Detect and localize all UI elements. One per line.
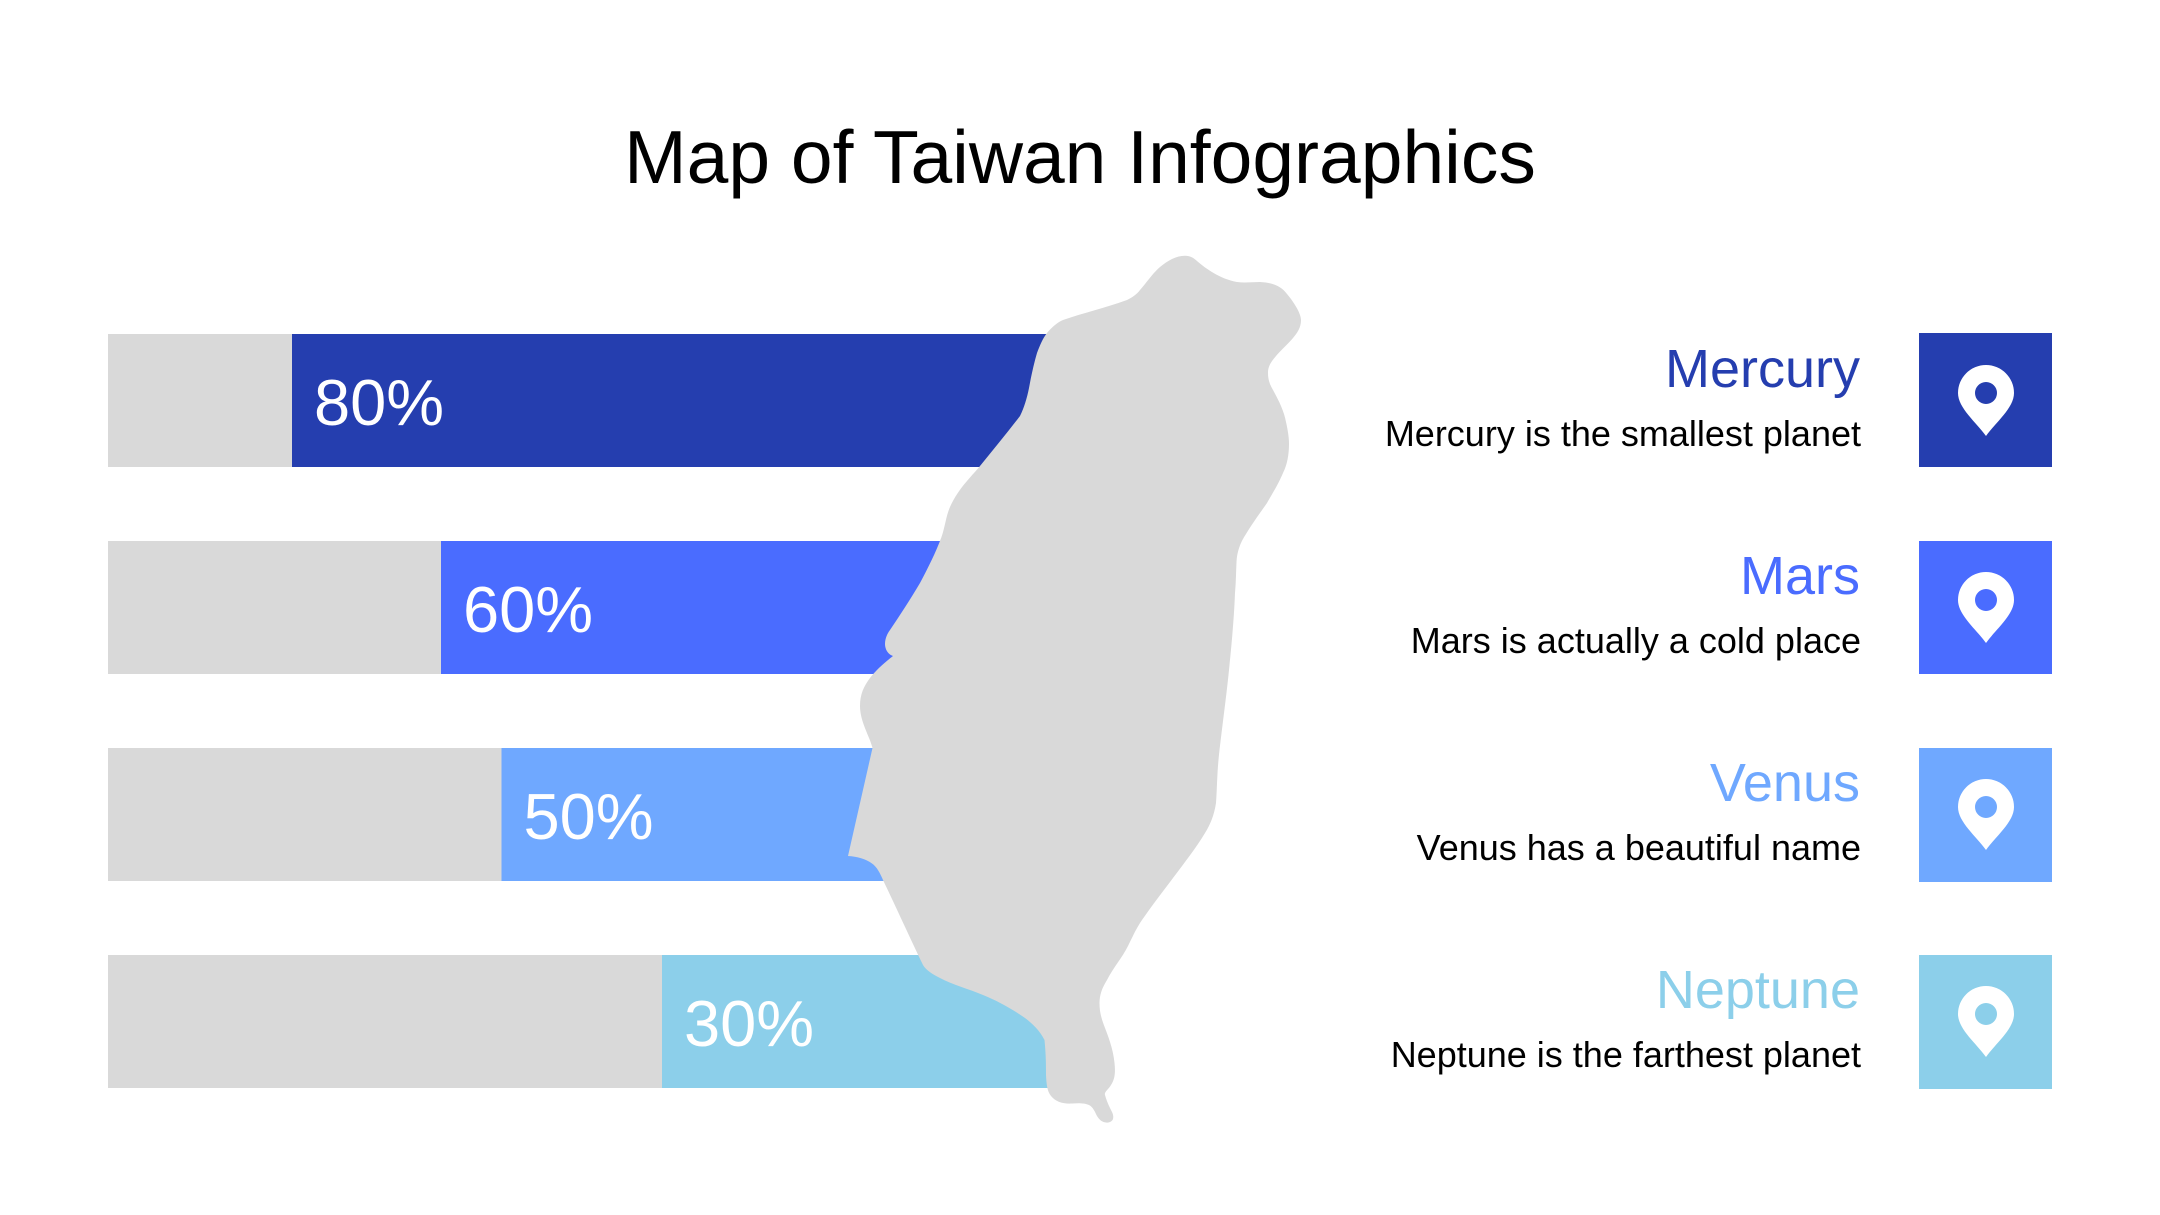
bar: 50% [108,748,942,881]
title: Map of Taiwan Infographics [624,115,1536,199]
legend item: Mars [1411,541,2052,674]
bar: 30% [108,955,1062,1088]
bar: 60% [108,541,1001,674]
bar chart [108,334,1092,1088]
legend item: Neptune [1391,955,2052,1089]
icon: location pin on light blue square [1919,748,2052,882]
bar: 50%: 50% [524,780,654,853]
description: Mars: Mars is actually a cold place [1411,620,1861,661]
name: Venus: Venus [1710,753,1860,813]
name: Mercury: Mercury [1665,339,1860,399]
bar: 80% [108,334,1092,467]
name: Neptune: Neptune [1656,960,1860,1020]
description: Mercury: Mercury is the smallest planet [1385,413,1861,454]
description: Venus: Venus has a beautiful name [1417,827,1861,868]
name: Mars: Mars [1740,546,1860,606]
bar: 30%: 30% [684,987,814,1060]
bar: 60%: 60% [463,573,593,646]
icon: location pin on dark blue square [1919,333,2052,467]
map of Taiwan [848,256,1301,1123]
legend item: Mercury [1385,333,2052,467]
description: Neptune: Neptune is the farthest planet [1391,1034,1861,1075]
icon: location pin on blue square [1919,541,2052,674]
icon: location pin on sky blue square [1919,955,2052,1089]
legend item: Venus [1417,748,2052,882]
bar: 80%: 80% [314,366,444,439]
